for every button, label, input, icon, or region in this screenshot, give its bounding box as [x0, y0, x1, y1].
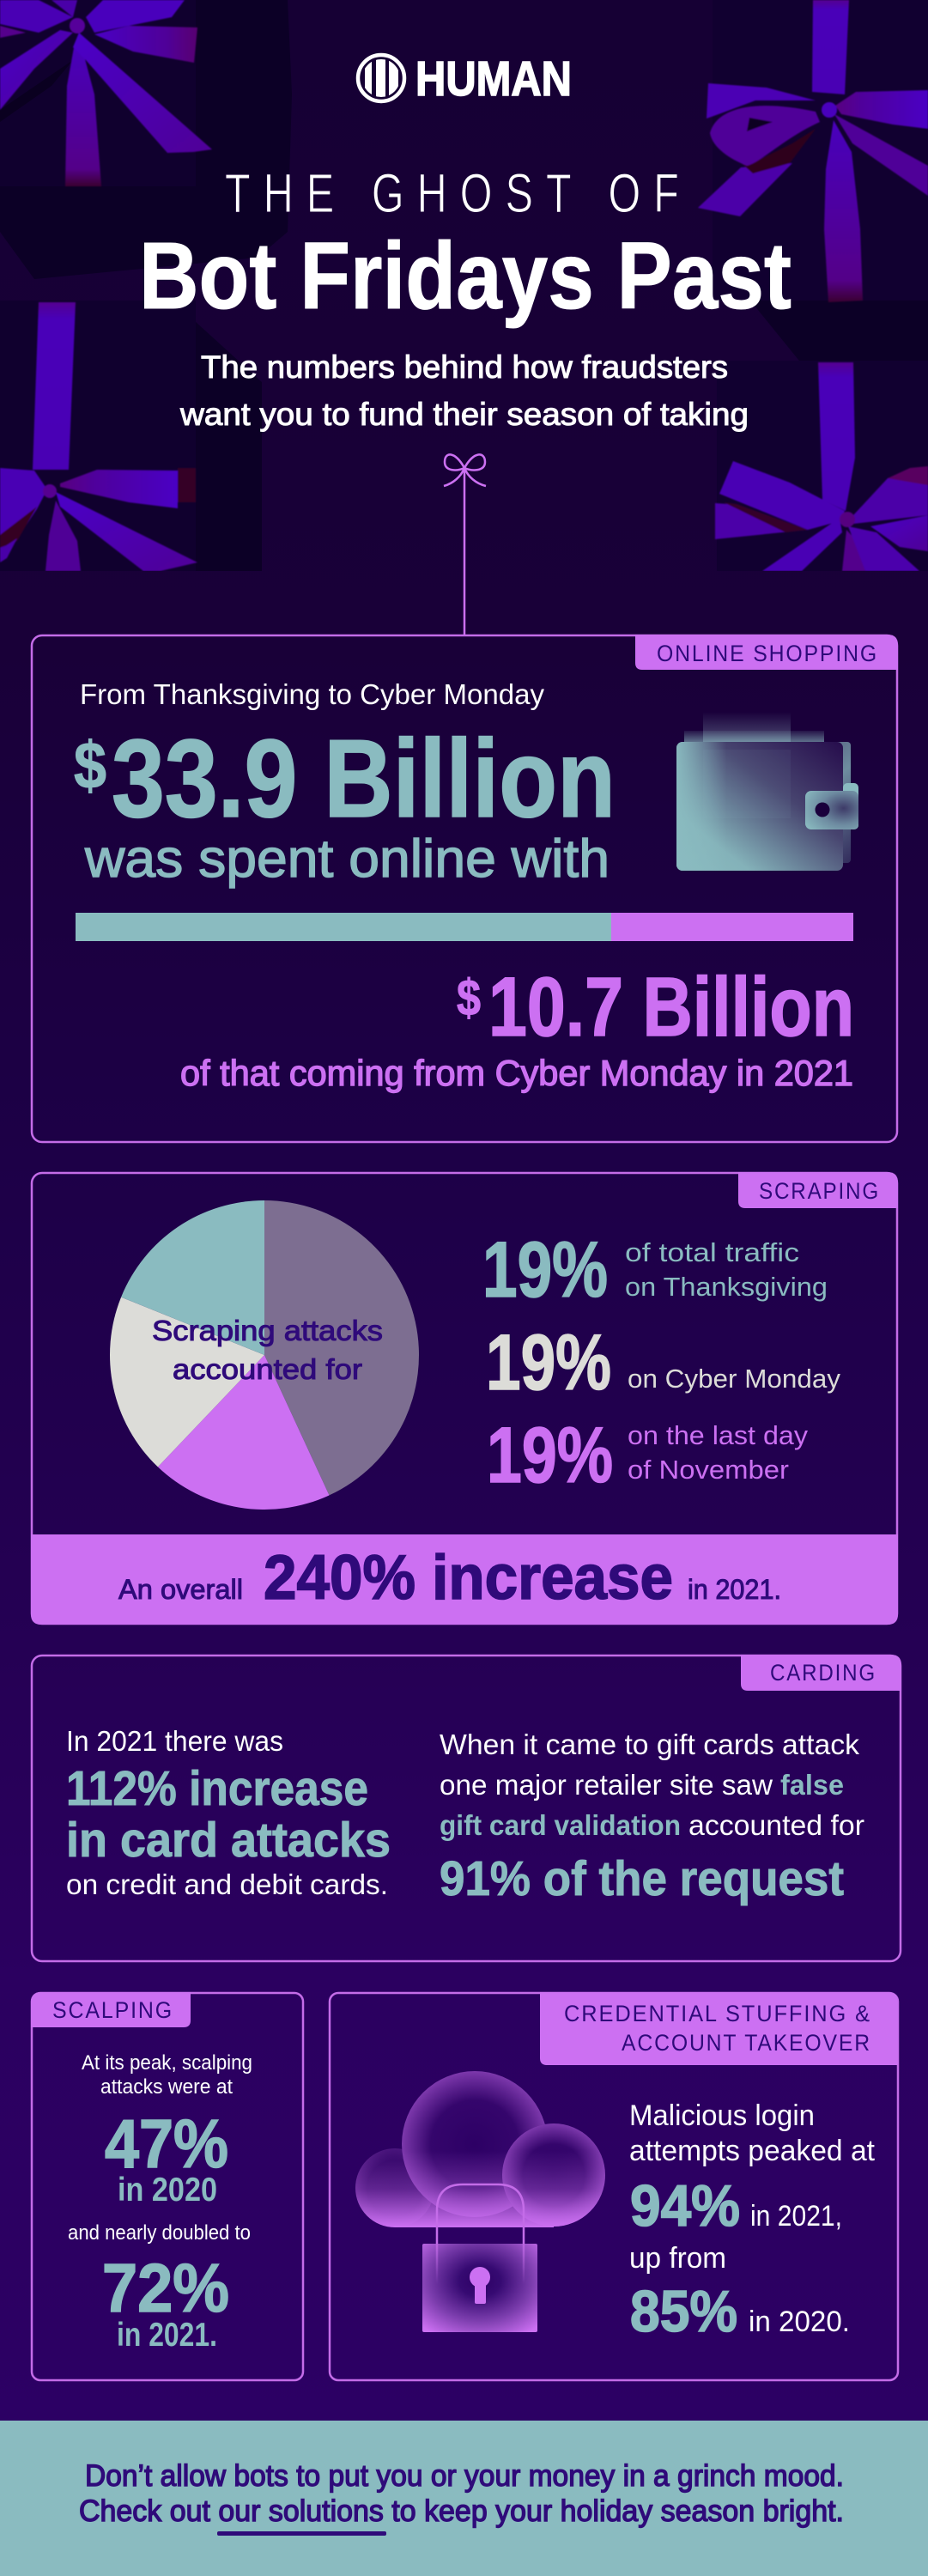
panel: scraping — [31, 1172, 898, 1625]
stat: thanksgiving: on Thanksgiving — [625, 1272, 828, 1302]
link underline — [217, 2531, 386, 2536]
text: nearly doubled: and nearly doubled to — [68, 2221, 251, 2245]
panel: online shopping — [32, 635, 898, 1142]
text: malicious login: attempts peaked at — [629, 2135, 876, 2167]
text: malicious login — [629, 2099, 876, 2167]
pie label: Scraping attacks — [152, 1315, 383, 1346]
gift box: top left — [0, 0, 292, 279]
stat: 72 percent — [102, 2250, 229, 2354]
text: was spent online: was spent online with — [84, 829, 610, 889]
chart: pie — [110, 1200, 419, 1510]
tab: carding: CARDING — [770, 1660, 876, 1686]
footer call to action — [0, 2421, 928, 2576]
text: malicious login: Malicious login — [629, 2099, 815, 2132]
footer text: Don’t allow bots to put you or your money in a grinch mood. — [85, 2459, 844, 2493]
text: gift cards: 91% of the request — [440, 1851, 844, 1906]
panel: scalping — [31, 1992, 303, 2380]
icon: cloud — [355, 2071, 605, 2227]
title: THE GHOST OF — [225, 162, 692, 224]
tab: online shopping: ONLINE SHOPPING — [657, 641, 878, 666]
text: gift cards — [440, 1728, 864, 1906]
stat: thanksgiving: of total traffic — [625, 1237, 799, 1267]
stat: 85 percent: 85% — [630, 2279, 737, 2344]
gift box: bottom left — [0, 301, 262, 571]
text: gift cards: one major retailer site saw — [440, 1769, 773, 1801]
subtitle: The numbers behind how fraudsters — [201, 349, 728, 385]
icon: padlock — [422, 2184, 537, 2332]
title: Bot Fridays Past — [139, 223, 792, 329]
tab: online shopping — [635, 635, 898, 670]
text: up from: up from — [629, 2242, 726, 2275]
panel: credential stuffing and account takeover — [330, 1992, 898, 2380]
gift box: bottom right — [715, 361, 928, 571]
stat: 10.7 billion: 10.7 Billion — [488, 960, 854, 1054]
tab: scalping — [31, 1992, 191, 2027]
gift boxes and ribbons — [0, 0, 928, 571]
stat: 94 percent: in 2021, — [750, 2200, 842, 2233]
stat: cyber monday: 19% — [486, 1319, 611, 1406]
footer text — [79, 2459, 844, 2528]
stat: 47 percent — [105, 2105, 228, 2208]
text: scalping peak — [82, 2051, 252, 2099]
text: scalping peak: At its peak, scalping — [82, 2051, 252, 2075]
stat: cyber monday — [486, 1319, 841, 1406]
tab: scraping — [738, 1172, 898, 1208]
subtitle: want you to fund their season of taking — [179, 397, 749, 432]
text: card attacks: on credit and debit cards. — [66, 1868, 388, 1900]
chart: spending bar — [76, 913, 853, 941]
stat: 10.7 billion: $ — [457, 969, 481, 1026]
stat: last day of november: 19% — [487, 1412, 613, 1499]
panel: carding — [32, 1655, 901, 1961]
stat: thanksgiving: 19% — [482, 1226, 608, 1314]
text: gift cards: false — [780, 1769, 844, 1801]
title — [139, 162, 792, 329]
text: cyber monday share: of that coming from Cyber Monday in 2021 — [180, 1053, 853, 1093]
stat: cyber monday: on Cyber Monday — [628, 1364, 841, 1394]
stat: 94 percent — [630, 2173, 842, 2239]
stat: 47 percent: in 2020 — [118, 2172, 217, 2208]
icon: wallet — [676, 712, 858, 871]
text: card attacks — [66, 1725, 391, 1900]
icon: ribbon bow and string — [444, 454, 486, 635]
banner: 240 percent increase: An overall — [118, 1574, 243, 1605]
text: date range: From Thanksgiving to Cyber Monday — [80, 678, 544, 710]
footer text: Check out our solutions to keep your holiday season bright. — [79, 2494, 844, 2528]
logo: HUMAN: HUMAN — [415, 52, 572, 106]
stat: 85 percent: in 2020. — [749, 2306, 850, 2338]
stat: 33.9 billion: 33.9 Billion — [112, 717, 616, 841]
stat: 85 percent — [630, 2279, 850, 2344]
stat: last day of november — [487, 1412, 809, 1499]
stat: 72 percent: in 2021. — [117, 2317, 217, 2354]
text: scalping peak: attacks were at — [100, 2075, 233, 2099]
pie label: accounted for — [173, 1353, 362, 1385]
text: card attacks: in card attacks — [66, 1813, 391, 1868]
logo: HUMAN — [358, 52, 572, 106]
stat: 33.9 billion: $ — [74, 729, 106, 803]
stat: last day of november: of November — [628, 1455, 789, 1485]
stat: 47 percent: 47% — [105, 2105, 228, 2182]
banner: 240 percent increase: 240% increase — [264, 1543, 673, 1613]
stat: 94 percent: 94% — [630, 2173, 740, 2239]
stat: thanksgiving — [482, 1226, 828, 1314]
stat: last day of november: on the last day — [628, 1420, 809, 1450]
text: gift cards: When it came to gift cards attack — [440, 1728, 860, 1760]
tab: scalping: SCALPING — [52, 1997, 173, 2023]
text: gift cards: accounted for — [688, 1809, 864, 1841]
text: card attacks: 112% increase — [66, 1761, 368, 1816]
gift box: top right — [698, 0, 928, 365]
text: card attacks: In 2021 there was — [66, 1725, 283, 1757]
banner: 240 percent increase — [31, 1534, 898, 1625]
subtitle — [179, 349, 749, 432]
tab: credential stuffing: ACCOUNT TAKEOVER — [622, 2030, 871, 2056]
text: gift cards: gift card validation — [440, 1809, 681, 1841]
tab: carding — [741, 1655, 901, 1691]
tab: scraping: SCRAPING — [759, 1178, 880, 1204]
tab: credential stuffing — [540, 1992, 898, 2065]
stat: 72 percent: 72% — [102, 2250, 229, 2326]
pie label — [152, 1315, 383, 1385]
banner: 240 percent increase: in 2021. — [688, 1574, 781, 1605]
tab: credential stuffing: CREDENTIAL STUFFING & — [564, 2001, 871, 2026]
